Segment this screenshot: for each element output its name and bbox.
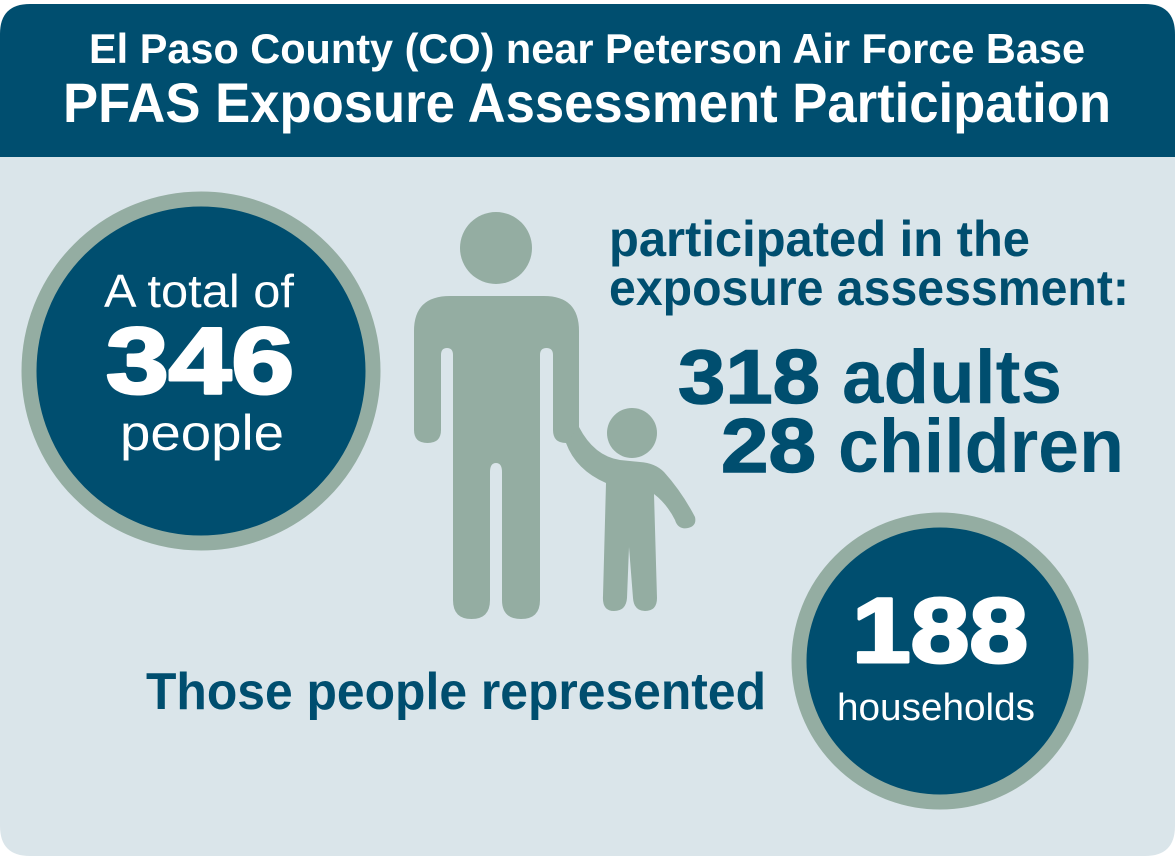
heading: title bbox=[63, 25, 1111, 134]
text: 318 adults, 28 children: 28 bbox=[721, 404, 816, 489]
icon: child figure bbox=[566, 408, 695, 611]
icon: adult holding child's hand bbox=[414, 212, 695, 619]
text: participated in the exposure assessment bbox=[609, 211, 1129, 316]
callout: 346 people circle: people bbox=[120, 405, 284, 461]
icon: adult figure bbox=[414, 212, 579, 619]
text: participated in the exposure assessment: exposure assessment: bbox=[609, 260, 1129, 316]
callout: 188 households circle: 188 bbox=[852, 580, 1028, 682]
callout: 346 people circle: A total of bbox=[104, 265, 294, 317]
text: those people represented: Those people represented bbox=[146, 663, 766, 721]
text: 318 adults, 28 children: adults bbox=[842, 335, 1062, 420]
text: 318 adults, 28 children: 318 bbox=[678, 335, 820, 420]
text: participated in the exposure assessment: participated in the bbox=[609, 211, 1030, 267]
text: 318 adults, 28 children bbox=[678, 335, 1124, 489]
callout: 346 people circle bbox=[29, 199, 373, 543]
callout: 346 people circle: 346 bbox=[106, 308, 294, 413]
callout: 188 households circle: households bbox=[837, 687, 1035, 729]
text: 318 adults, 28 children: children bbox=[838, 404, 1124, 489]
heading: title: PFAS Exposure Assessment Participation bbox=[63, 71, 1111, 134]
panel: header band bbox=[0, 4, 1175, 157]
callout: 188 households circle bbox=[799, 520, 1081, 802]
heading: title: El Paso County (CO) near Peterson Air Force Base bbox=[89, 25, 1085, 72]
